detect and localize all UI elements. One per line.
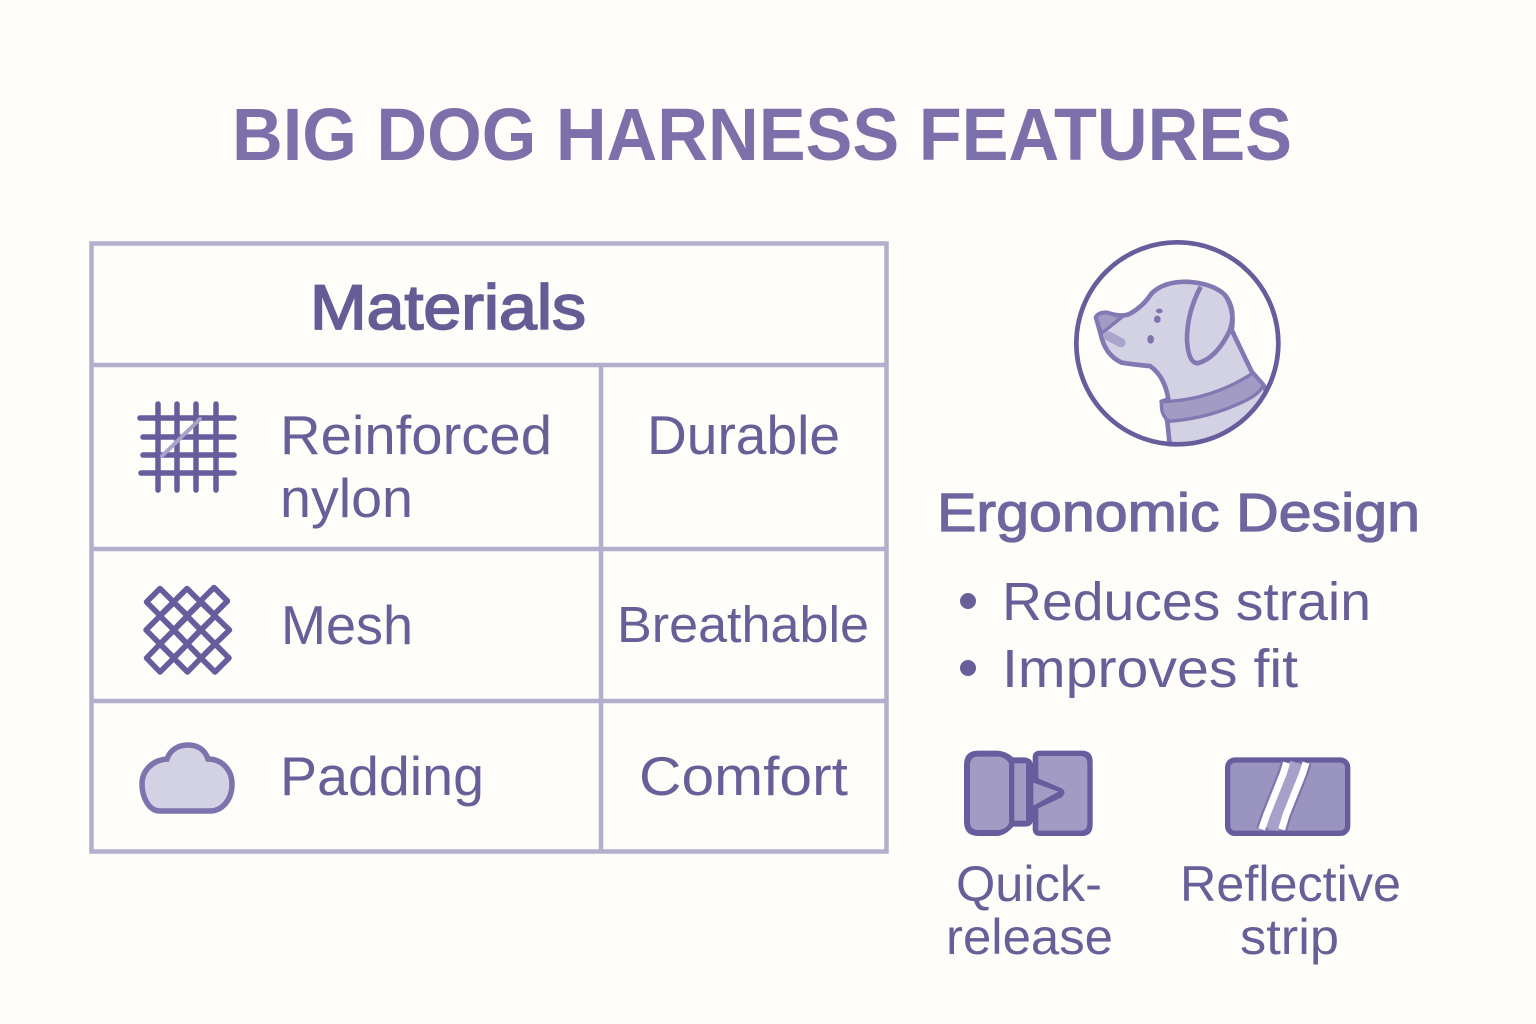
buckle middle bar — [1014, 763, 1026, 821]
buckle left piece — [970, 757, 1009, 830]
label: reflective strip: Reflective — [1180, 856, 1401, 912]
strip body — [1228, 760, 1348, 833]
text: comfort: Comfort — [639, 745, 848, 807]
text: padding: Padding — [280, 745, 484, 807]
heading: ergonomic design: Ergonomic Design — [937, 483, 1420, 543]
icon: quick-release buckle — [964, 751, 1093, 836]
strip shadow lines — [1262, 763, 1306, 829]
title: BIG DOG HARNESS FEATURES — [232, 93, 1292, 176]
icon: dog in circle — [1076, 242, 1287, 463]
buckle outline — [964, 751, 1093, 836]
text: reduces strain: Reduces strain — [1002, 572, 1371, 632]
text: mesh: Mesh — [281, 594, 413, 656]
icon: padding cloud — [142, 745, 232, 811]
label: quick-release: release — [946, 909, 1113, 965]
text: durable: Durable — [647, 404, 840, 466]
bullet two — [960, 660, 976, 676]
text: reinforced nylon: nylon — [280, 467, 413, 529]
dog head and body — [1094, 279, 1266, 442]
table heading: materials: Materials — [310, 273, 586, 343]
label: quick-release — [946, 856, 1113, 965]
dog facial dots — [1147, 309, 1163, 344]
icon: reinforced nylon grid — [140, 404, 234, 490]
panel: materials table — [92, 244, 886, 852]
dog ear — [1187, 287, 1232, 363]
label: quick-release: Quick- — [956, 856, 1102, 912]
label: reflective strip — [1180, 856, 1401, 965]
icon: reflective strip — [1228, 760, 1348, 833]
buckle prong — [1033, 783, 1058, 806]
strip centre band — [1272, 763, 1296, 829]
table grid — [92, 244, 886, 852]
text: improves fit: Improves fit — [1002, 639, 1298, 699]
text: reinforced nylon: Reinforced — [280, 404, 552, 466]
text: reinforced nylon — [280, 404, 552, 529]
label: reflective strip: strip — [1240, 909, 1339, 965]
dog collar — [1161, 373, 1263, 421]
text: breathable: Breathable — [617, 596, 869, 653]
bullet one — [960, 593, 976, 609]
strip white lines — [1262, 763, 1306, 829]
circle ring — [1076, 242, 1278, 444]
icon: mesh lattice — [146, 588, 230, 672]
dog muzzle mark — [1108, 336, 1121, 343]
buckle right piece — [1038, 756, 1087, 831]
list: ergonomic benefits — [960, 572, 1371, 699]
dog nose — [1096, 313, 1122, 333]
